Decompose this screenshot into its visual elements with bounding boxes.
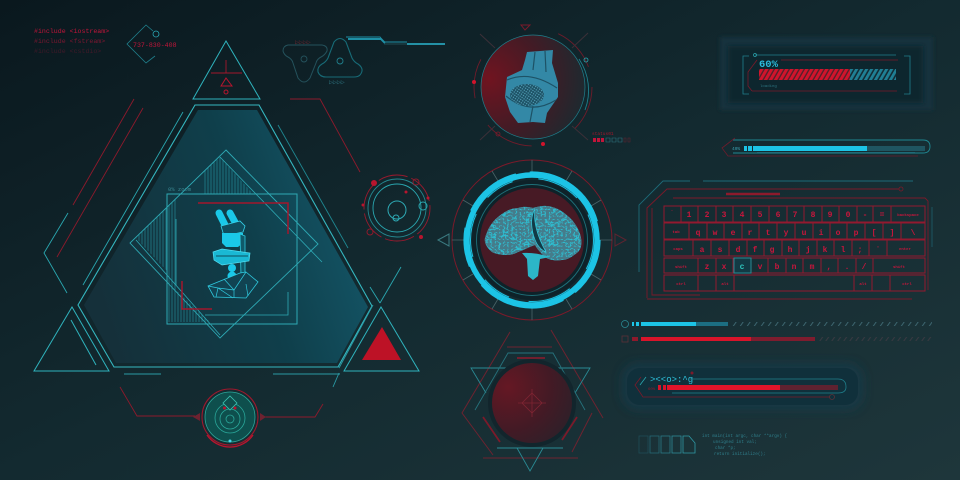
hatched frame area: [130, 150, 322, 338]
key legends: g: [770, 246, 775, 255]
code text block top left: #include <fstream>: [34, 38, 105, 45]
keyboard frame: [639, 181, 932, 299]
key legends: shift: [893, 265, 906, 270]
progress bar capsule: [722, 138, 930, 156]
file tab icons: [639, 436, 695, 453]
key legends: 0: [846, 211, 851, 220]
small caption text: char *p;: [715, 446, 736, 451]
percent label: 60%: [759, 59, 779, 71]
key legends: b: [775, 263, 780, 272]
mini status readout: [592, 131, 630, 142]
key legends: ': [876, 246, 880, 252]
key legends: `: [670, 210, 674, 216]
key legends: [: [872, 229, 876, 238]
bottom right triangle with red warning: [344, 307, 419, 371]
cyan segment bar: [622, 320, 932, 328]
key legends: j: [806, 246, 810, 255]
key legends: caps: [673, 248, 683, 252]
specimen frame with microscope: [130, 150, 322, 338]
progress panel 60 percent: [720, 37, 933, 110]
orbital circle widget: [362, 175, 430, 241]
knee scan widget: [472, 25, 592, 146]
brain: [485, 206, 581, 260]
key legends: alt: [721, 282, 729, 287]
key legends: x: [722, 263, 727, 272]
bottom radar badge: [120, 387, 323, 447]
top small triangle: [193, 41, 260, 99]
key legends: 1: [687, 211, 692, 220]
key legends: z: [705, 263, 710, 272]
key legends: n: [792, 263, 797, 272]
key legends: ;: [858, 246, 862, 255]
key legends: \: [911, 229, 916, 238]
triangular gear icons: ▷▷▷▷: [295, 39, 311, 46]
microscope: [208, 213, 258, 298]
diamond code tag: 737-830-408: [133, 42, 177, 49]
highlighted key: [734, 258, 751, 273]
key legends: 3: [722, 211, 727, 220]
code text block top left: #include <cstdio>: [34, 48, 101, 55]
key legends: .: [845, 263, 849, 272]
key legends: 7: [793, 211, 798, 220]
key legends: =: [880, 211, 885, 220]
key legends: f: [753, 246, 758, 255]
key legends: ctrl: [902, 282, 912, 287]
key legends: 8: [811, 211, 816, 220]
zoom label: 0% zoom: [168, 186, 192, 193]
key legends: /: [862, 263, 867, 272]
key legends: h: [788, 246, 793, 255]
decoding progress panel: [622, 363, 863, 410]
key legends: ]: [890, 229, 894, 238]
key legends: [670, 210, 919, 287]
mini status readout: status01: [592, 131, 614, 137]
key legends: 4: [740, 211, 745, 220]
key legends: 2: [705, 211, 710, 220]
keyboard: [639, 181, 932, 299]
key legends: p: [854, 229, 859, 238]
key legends: o: [836, 229, 841, 238]
key legends: i: [819, 229, 824, 238]
key legends: 5: [758, 211, 763, 220]
small caption text: [702, 434, 788, 457]
key legends: tab: [672, 230, 680, 235]
key legends: u: [802, 229, 807, 238]
code text block top left: [34, 28, 109, 55]
small caption text: int main(int argc, char **argv) {: [702, 434, 788, 439]
side accent lines: [44, 99, 401, 387]
key legends: s: [718, 246, 723, 255]
red segment bar: [622, 336, 932, 342]
key legends: m: [810, 263, 815, 272]
top data line: [346, 37, 445, 44]
key legends: shift: [675, 265, 688, 270]
highlighted key: c: [740, 263, 745, 272]
key legends: ,: [827, 263, 831, 272]
key legends: ctrl: [676, 282, 686, 287]
key legends: enter: [899, 247, 912, 252]
keys: [664, 206, 925, 291]
triangular gear icons: [283, 38, 362, 86]
decoding progress panel: ><<o>:^g: [650, 375, 693, 385]
knee joint: [505, 50, 558, 123]
key legends: w: [713, 229, 718, 238]
decoding progress panel: 60%: [648, 388, 656, 392]
key legends: a: [700, 246, 705, 255]
main triangle panel: [78, 105, 372, 367]
progress panel 60 percent: loading: [760, 84, 777, 89]
key legends: e: [731, 229, 736, 238]
progress bar capsule: 40%: [732, 146, 740, 152]
key legends: k: [823, 246, 828, 255]
key legends: q: [696, 229, 701, 238]
diamond code tag: [127, 25, 177, 63]
cyan glitch ring: [464, 172, 600, 308]
small caption text: unsigned int val;: [713, 440, 757, 445]
key legends: y: [784, 229, 789, 238]
small caption text: return initialize();: [714, 452, 766, 457]
key legends: -: [863, 211, 867, 220]
bottom left triangle: [34, 307, 109, 371]
red corner brackets: [182, 203, 288, 309]
key legends: 9: [828, 211, 833, 220]
triangular gear icons: ▷▷▷▷: [329, 79, 345, 86]
key legends: t: [766, 229, 771, 238]
key legends: d: [736, 246, 741, 255]
key legends: alt: [859, 282, 867, 287]
brain scan widget: [438, 160, 626, 320]
key legends: backspace: [897, 213, 919, 218]
key legends: 6: [776, 211, 781, 220]
code text block top left: #include <iostream>: [34, 28, 109, 35]
key legends: r: [748, 229, 753, 238]
hexagon target widget: [462, 330, 603, 471]
key legends: l: [841, 246, 846, 255]
key legends: v: [758, 263, 763, 272]
